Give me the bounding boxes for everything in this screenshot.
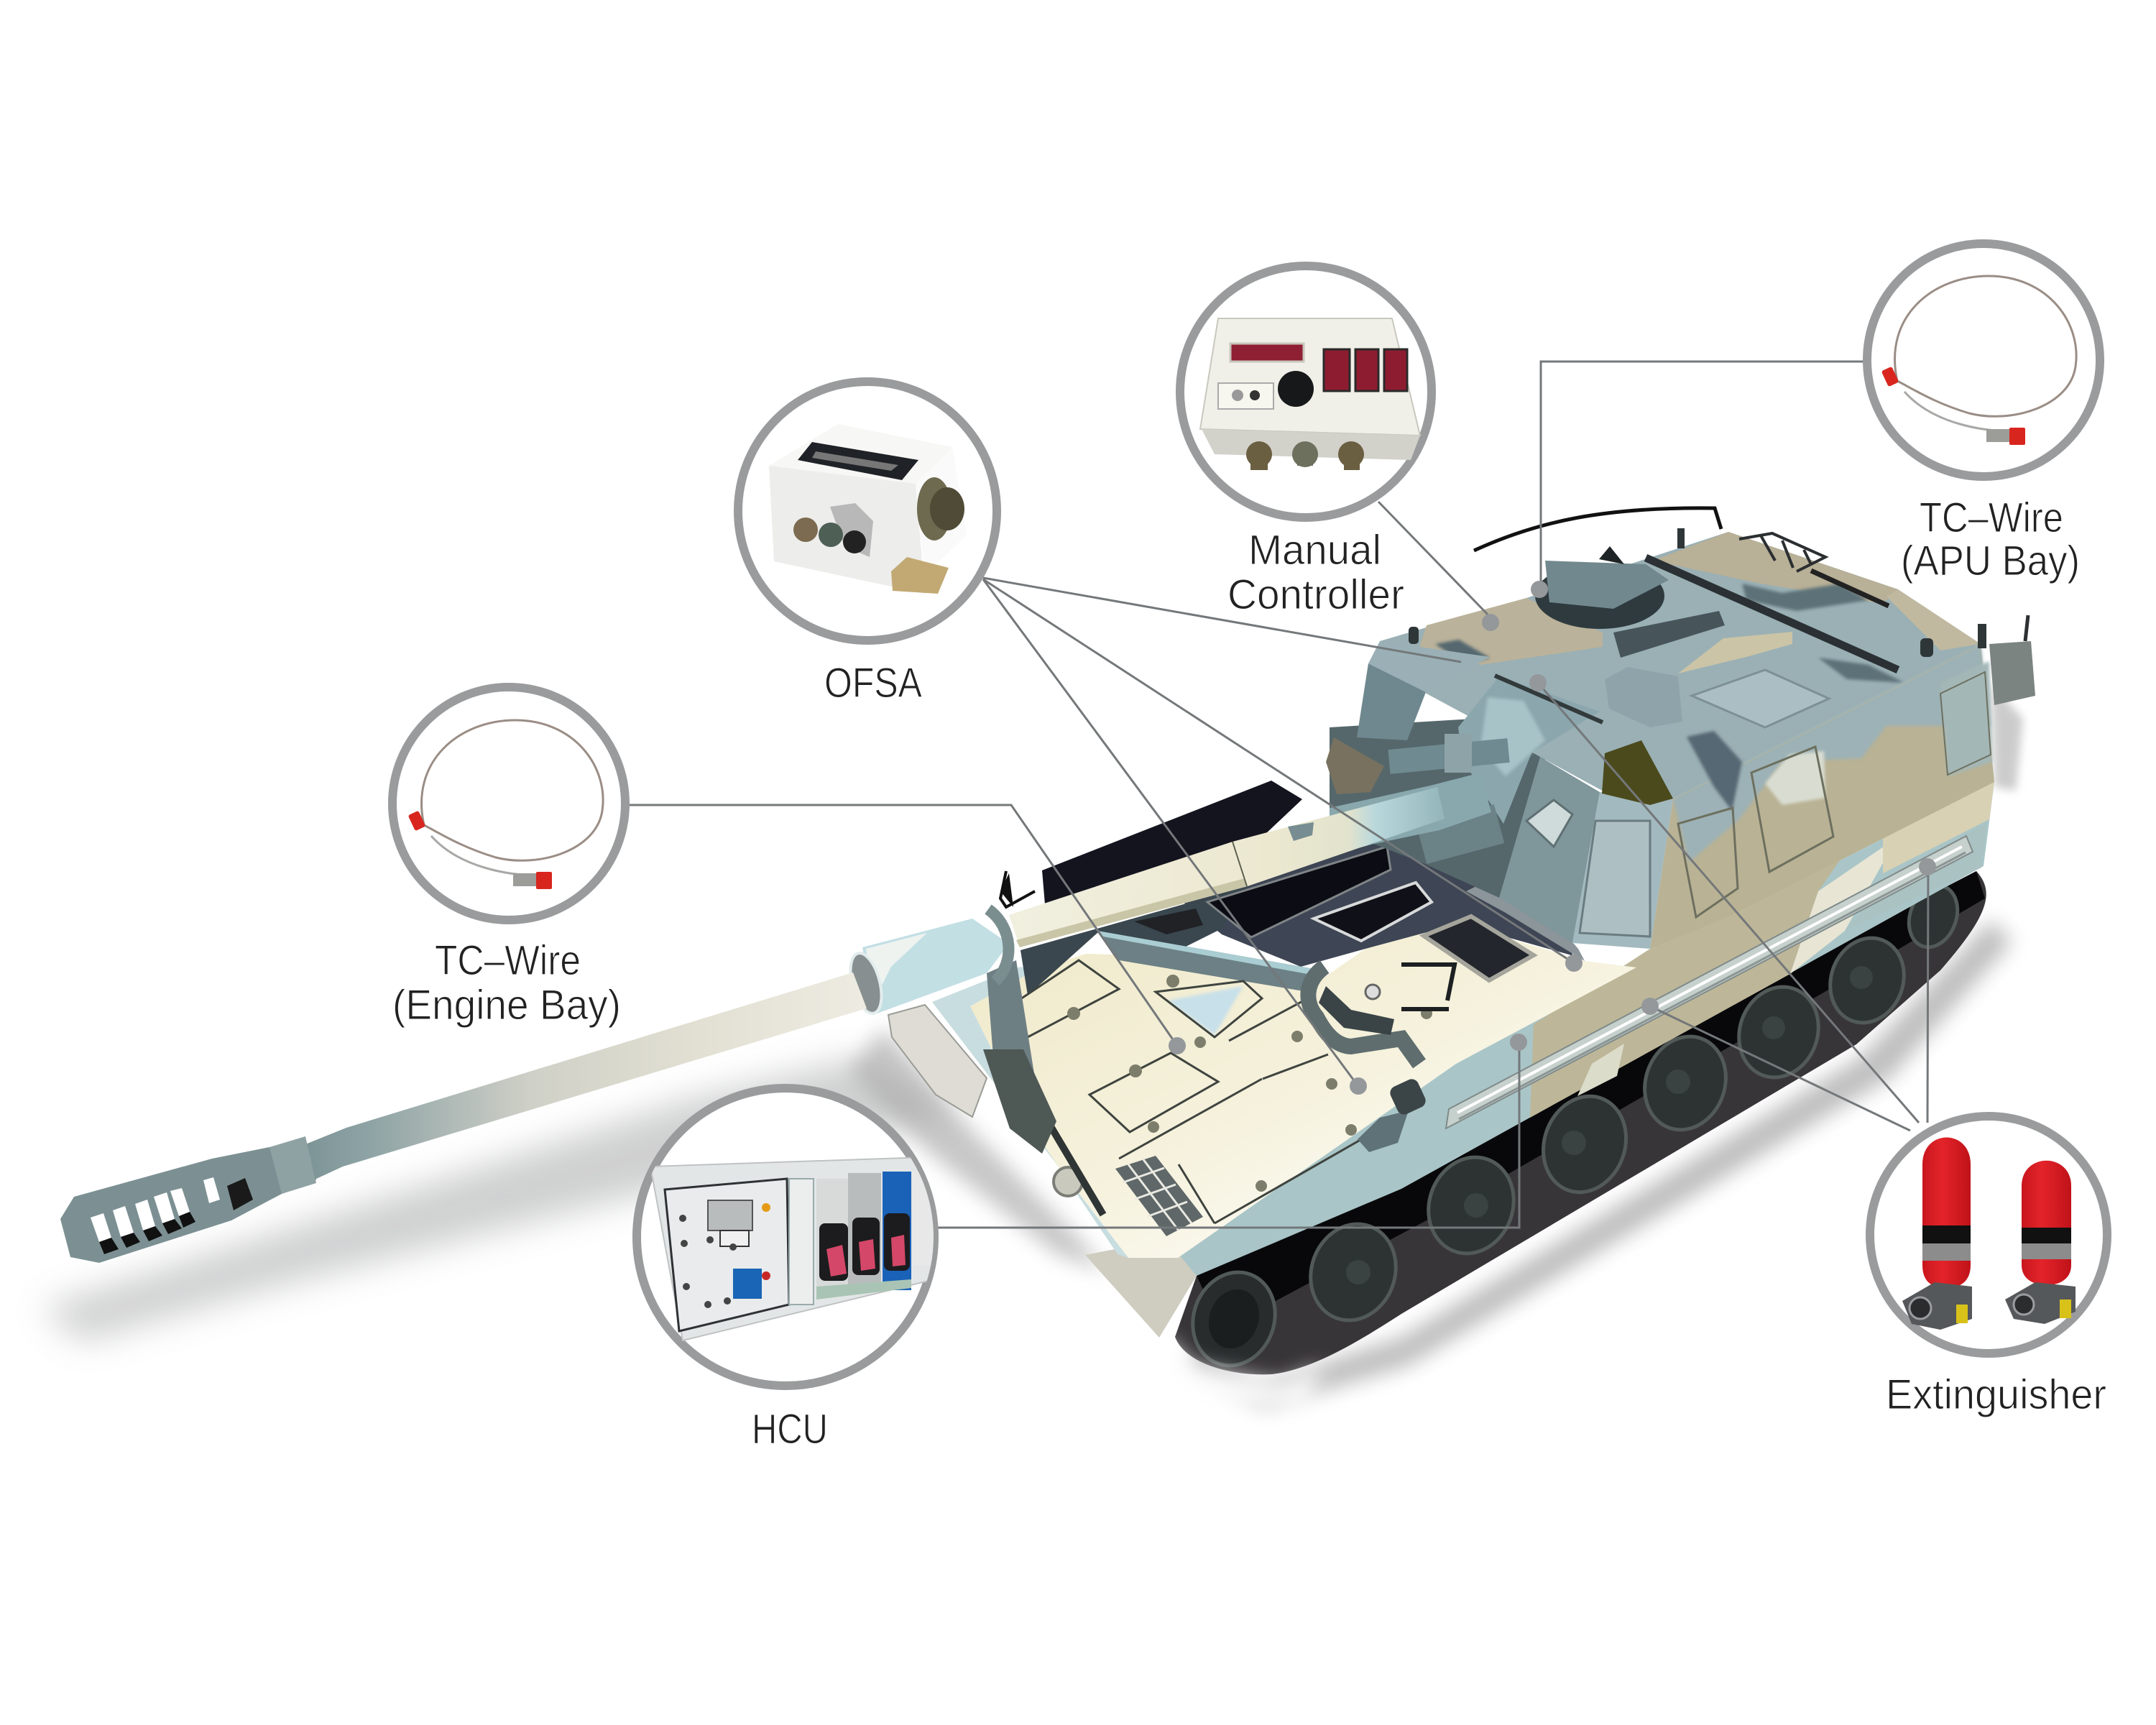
left turret block [1357,663,1426,740]
side stowage strip [1446,836,1973,1128]
dark side skirt behind barrel [1042,781,1302,913]
icon: left extinguisher bottle [1902,1137,1972,1330]
icon: manual controller panel [1200,318,1420,470]
barrel fume extractor [862,919,1009,1015]
front mudguard [888,1005,987,1117]
label: Manual Controller: Controller [1227,571,1404,618]
roof long box [1613,611,1725,658]
hatches [1016,960,1394,1223]
front grille [1115,1156,1203,1236]
label: Manual Controller: Manual [1248,527,1381,574]
dark engine panels [1207,847,1391,937]
recoil cylinders [1389,750,1508,762]
track front fade [1157,1330,1322,1409]
olive sensor [1602,740,1673,805]
muzzle brake [60,1139,316,1263]
roof cream block [1678,632,1792,673]
callout: HCU [637,1088,934,1453]
engine deck louver [1424,916,1534,980]
front bumper ball [1054,1167,1082,1196]
rear stowage box [1989,641,2035,705]
cupola [1535,563,1664,629]
left cheek [1499,757,1600,943]
turret [1326,508,2035,949]
hull side plate [1178,782,1994,1276]
barrel [305,972,867,1180]
leader lines [629,362,1936,1228]
main tube [1009,787,1445,947]
callout: OFSA [738,382,997,707]
main gun [60,734,1508,1263]
mantlet drum [1458,676,1600,824]
gun mount base [1330,719,1545,902]
commander ring [1308,967,1419,1064]
travel lock [987,960,1035,1078]
icon: thermocouple wire [408,720,603,889]
callout: TC-Wire Engine Bay [392,687,625,1029]
label: TC-Wire (APU Bay): TC–Wire [1920,494,2063,541]
engine deck [932,841,1636,1258]
anchor dots [1169,581,1936,1095]
side face [1650,644,1994,949]
icon: right extinguisher bottle [2005,1161,2076,1324]
hull front ground shadow [848,1028,1107,1272]
roof hatch [1692,670,1829,727]
strut [1097,931,1322,992]
deck camo patch [1358,1110,1409,1152]
sight block [1605,667,1682,727]
callout: Manual Controller [1180,266,1432,618]
icon: thermocouple wire [1881,276,2076,445]
callout: TC-Wire APU Bay [1867,244,2100,584]
icon: OFSA sensor box [769,424,967,594]
raised panel behind turret [1179,841,1574,967]
antenna [1474,508,1721,551]
callout: Extinguisher [1870,1116,2107,1418]
roof rails [1646,558,1898,670]
front glacis plate [1085,1247,1197,1338]
label: HCU: HCU [752,1406,828,1453]
vision block [1526,800,1572,847]
tank illustration [41,508,2035,1409]
label: TC-Wire (Engine Bay): TC–Wire [435,937,581,984]
label: Extinguisher: Extinguisher [1886,1371,2106,1418]
under-gun dark area [1021,886,1248,995]
icon: HCU control panel [650,1157,934,1340]
front door face [1572,792,1673,949]
roof [1380,532,1981,799]
tie-downs [1409,528,1986,657]
label: TC-Wire (Engine Bay): (Engine Bay) [392,982,621,1029]
brown plate [1326,737,1384,794]
hull rear ground shadow [1186,920,2012,1409]
label: TC-Wire (APU Bay): (APU Bay) [1901,538,2080,584]
barrel ground shadow [41,1059,949,1341]
label: OFSA: OFSA [824,660,922,707]
track and road wheels [1157,871,1986,1409]
deck bolts [1067,975,1432,1192]
